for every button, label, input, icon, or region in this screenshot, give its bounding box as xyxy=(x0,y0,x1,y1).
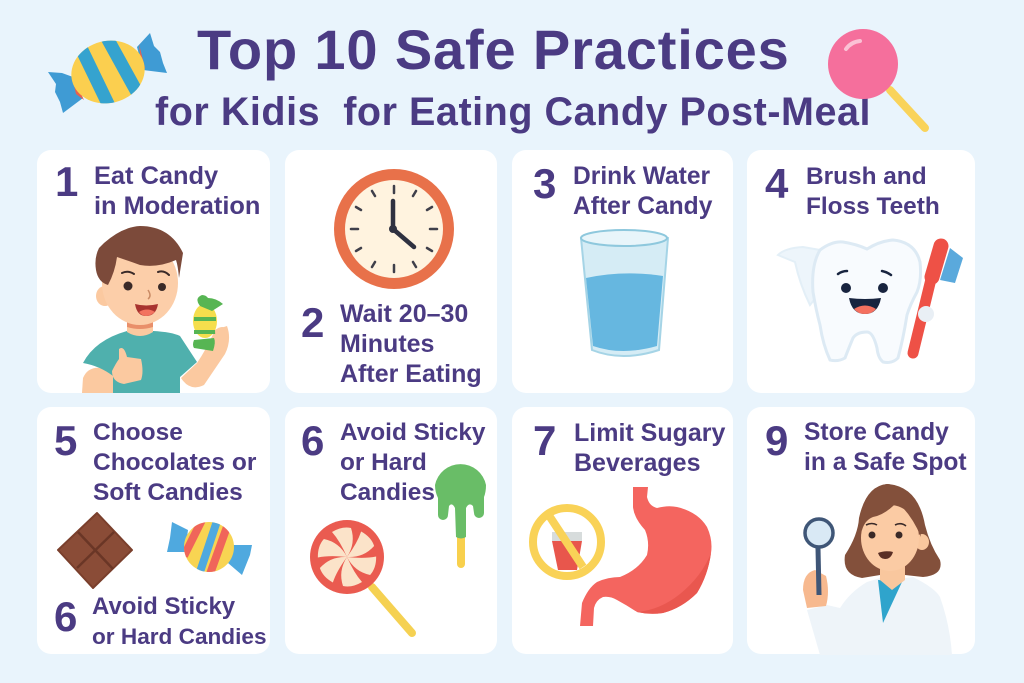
number 1: 1 xyxy=(55,158,78,205)
heading 4: Floss Teeth xyxy=(806,193,940,220)
heading 1: in Moderation xyxy=(94,192,260,220)
heading 6 lower: or Hard Candies xyxy=(92,624,267,649)
icon: woman with magnifier xyxy=(803,484,952,655)
heading 6: or Hard xyxy=(340,449,427,476)
heading 9 xyxy=(804,419,967,476)
panel: 9 store xyxy=(747,407,975,654)
icon: swirl lollipop xyxy=(310,520,412,633)
panel: 4 brush xyxy=(747,150,975,393)
number 5: 5 xyxy=(54,417,77,464)
heading 1: Eat Candy xyxy=(94,162,218,190)
icon: striped candy xyxy=(48,33,167,113)
panel: 6 sticky xyxy=(285,407,497,654)
icon: lollipop xyxy=(828,29,925,128)
title line 2: for Kidis for Eating Candy Post-Meal xyxy=(155,90,871,134)
heading 4: Brush and xyxy=(806,163,927,190)
panel: 1 eat candy xyxy=(37,150,270,393)
heading 1 xyxy=(94,162,260,220)
number 9: 9 xyxy=(765,417,788,464)
heading 9: Store Candy xyxy=(804,419,949,446)
heading 6 lower: Avoid Sticky xyxy=(92,593,235,620)
panel: 5 chocolates xyxy=(37,407,270,654)
icon: melting green lollipop xyxy=(435,464,486,564)
title line 1: Top 10 Safe Practices xyxy=(197,18,790,81)
icon: stomach xyxy=(580,487,712,626)
heading 6: Avoid Sticky xyxy=(340,419,486,446)
heading 4 xyxy=(806,163,940,220)
heading 5: Soft Candies xyxy=(93,479,243,506)
panel: 3 water xyxy=(512,150,733,393)
icon: small striped candy xyxy=(167,520,252,575)
panel: 2 wait xyxy=(285,150,497,393)
number 4: 4 xyxy=(765,160,788,207)
heading 5 xyxy=(93,419,256,506)
icon: clock xyxy=(334,169,454,289)
heading 9: in a Safe Spot xyxy=(804,449,967,476)
number 6: 6 xyxy=(301,417,324,464)
heading 2 xyxy=(340,300,482,388)
number 3: 3 xyxy=(533,160,556,207)
icon: boy with candy xyxy=(82,226,229,393)
number 6 lower: 6 xyxy=(54,593,77,640)
heading 7 xyxy=(574,419,726,477)
heading 6 lower xyxy=(92,593,267,649)
heading 6 xyxy=(340,419,486,506)
heading 5: Choose xyxy=(93,419,183,446)
heading 2: Minutes xyxy=(340,330,434,358)
number 2: 2 xyxy=(301,299,324,346)
heading 2: Wait 20–30 xyxy=(340,300,468,328)
heading 7: Beverages xyxy=(574,449,700,477)
icon: smiling tooth and brush xyxy=(778,240,963,362)
heading 2: After Eating xyxy=(340,360,482,388)
heading 6: Candies xyxy=(340,479,435,506)
number 7: 7 xyxy=(533,417,556,464)
icon: glass of water xyxy=(581,230,668,356)
heading 5: Chocolates or xyxy=(93,449,256,476)
heading 3: Drink Water xyxy=(573,163,710,190)
panel: 7 beverages xyxy=(512,407,733,654)
heading 3: After Candy xyxy=(573,193,712,220)
icon: chocolate bar xyxy=(58,513,132,588)
heading 7: Limit Sugary xyxy=(574,419,725,447)
icon: no soda sign xyxy=(533,508,601,576)
heading 3 xyxy=(573,163,712,220)
